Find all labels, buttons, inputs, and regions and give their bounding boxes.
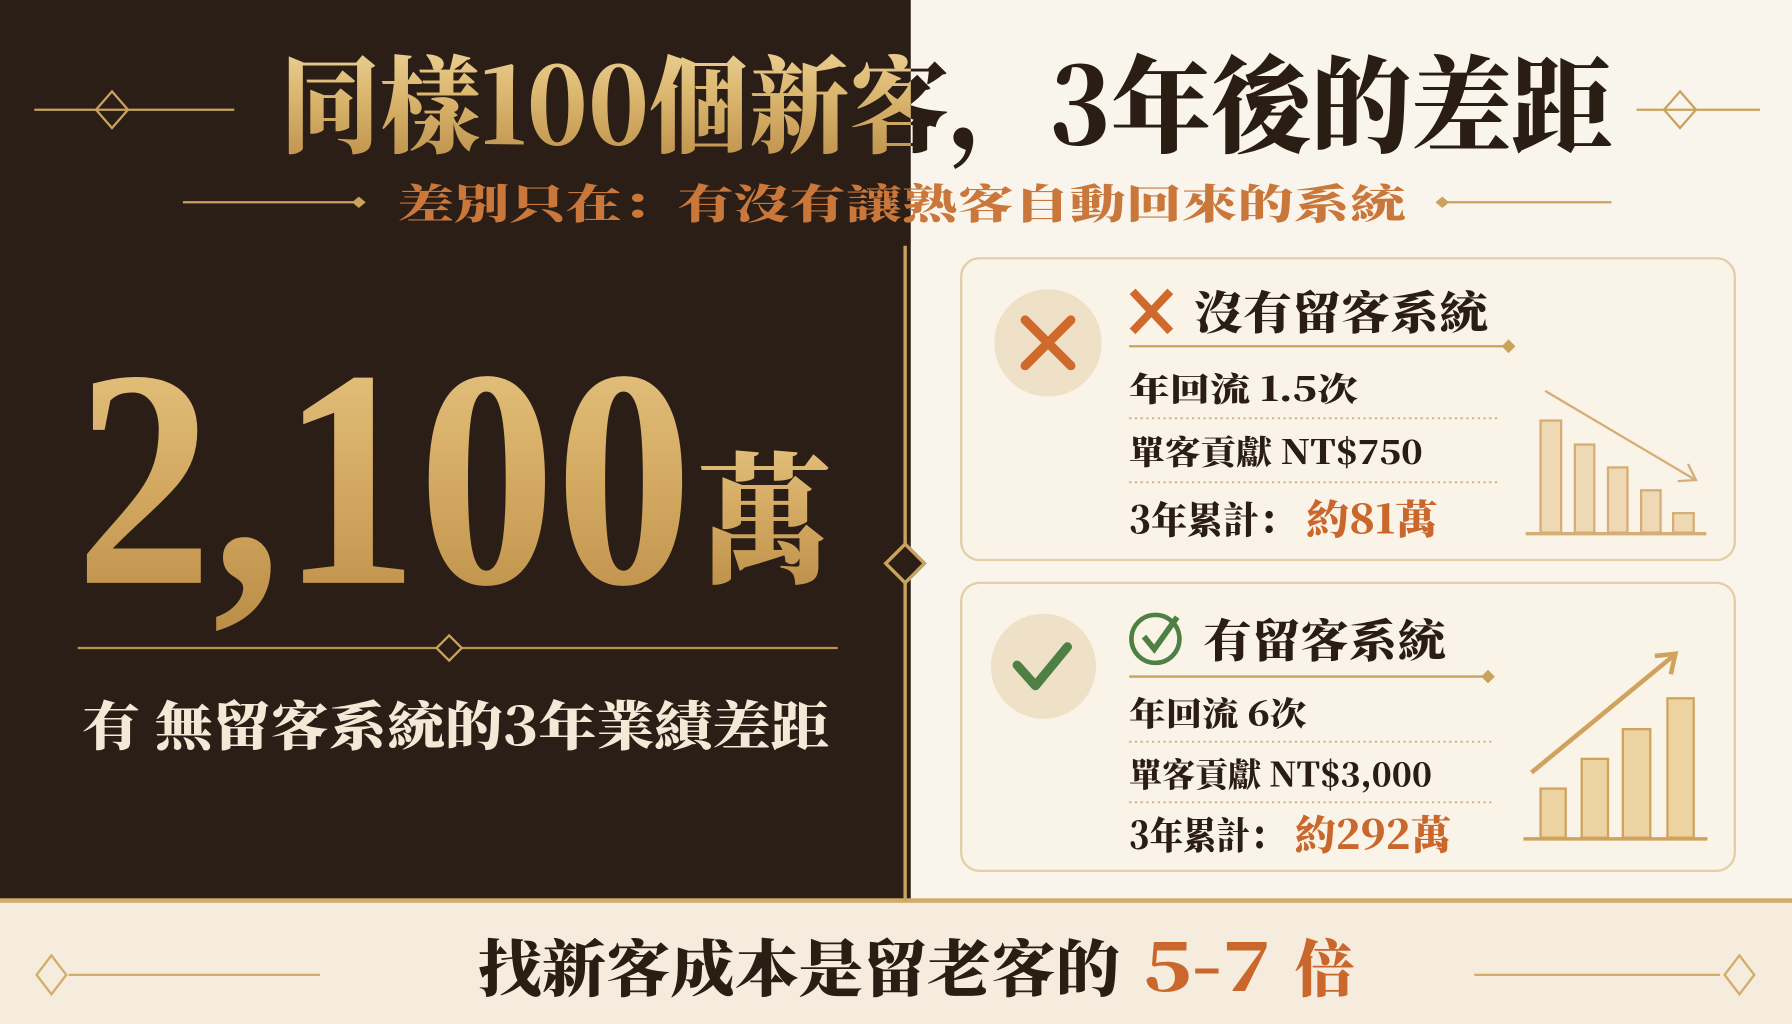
stats rows: 單客貢獻 NT$750 — [1129, 427, 1423, 474]
big number 2,100萬: 萬 — [697, 408, 832, 612]
heading: 有留客系統 — [1129, 605, 1495, 683]
subtitle with side lines: 差別只在：有沒有讓熟客自動回來的系統 — [398, 171, 1410, 230]
heading: 沒有留客系統: 沒有留客系統 — [1194, 277, 1492, 343]
title: 同樣100個新客，3年後的差距 — [280, 24, 1612, 175]
background: cream right panel — [911, 0, 1792, 901]
stats rows: 3年累計： — [1129, 491, 1295, 545]
title: 同樣100個新客，3年後的差距 — [280, 24, 1612, 175]
vertical divider with diamond — [886, 246, 925, 901]
heading: 沒有留客系統 — [1129, 277, 1515, 353]
chart: declining bars — [1526, 391, 1706, 534]
bottom strip — [0, 898, 1792, 1024]
background: dark left panel — [0, 0, 911, 901]
caption: 有 無留客系統的3年業績差距 — [82, 685, 829, 761]
stats rows: 年回流 1.5次 — [1129, 364, 1358, 411]
heading: 有留客系統: 有留客系統 — [1203, 605, 1449, 671]
stats rows: 3年累計： — [1129, 806, 1283, 860]
bottom ornament right — [1474, 955, 1754, 994]
big number 2,100萬: 2,100 — [75, 307, 693, 651]
bottom ornament left — [37, 955, 320, 994]
stats rows: 年回流 6次 — [1129, 689, 1306, 736]
bottom message: 找新客成本是留老客的 — [478, 920, 1120, 1009]
card: with retention system — [961, 583, 1735, 871]
title ornament right — [1637, 91, 1760, 128]
stats rows: 約81萬 — [1306, 489, 1438, 546]
stats rows — [1129, 689, 1491, 861]
divider under number — [78, 635, 838, 661]
bottom message: 倍 — [1295, 920, 1355, 1009]
stats rows: 約292萬 — [1295, 804, 1451, 861]
title ornament left — [34, 91, 234, 128]
chart: rising bars — [1523, 654, 1707, 839]
bottom message — [478, 912, 1355, 1011]
stats rows: 單客貢獻 NT$3,000 — [1129, 749, 1432, 796]
icon: X circle — [994, 289, 1102, 397]
card: without retention system — [961, 258, 1735, 560]
icon: check circle — [991, 614, 1096, 719]
subtitle with side lines — [183, 171, 1611, 230]
stats rows — [1129, 364, 1501, 546]
bottom message: 5-7 — [1143, 912, 1271, 1011]
